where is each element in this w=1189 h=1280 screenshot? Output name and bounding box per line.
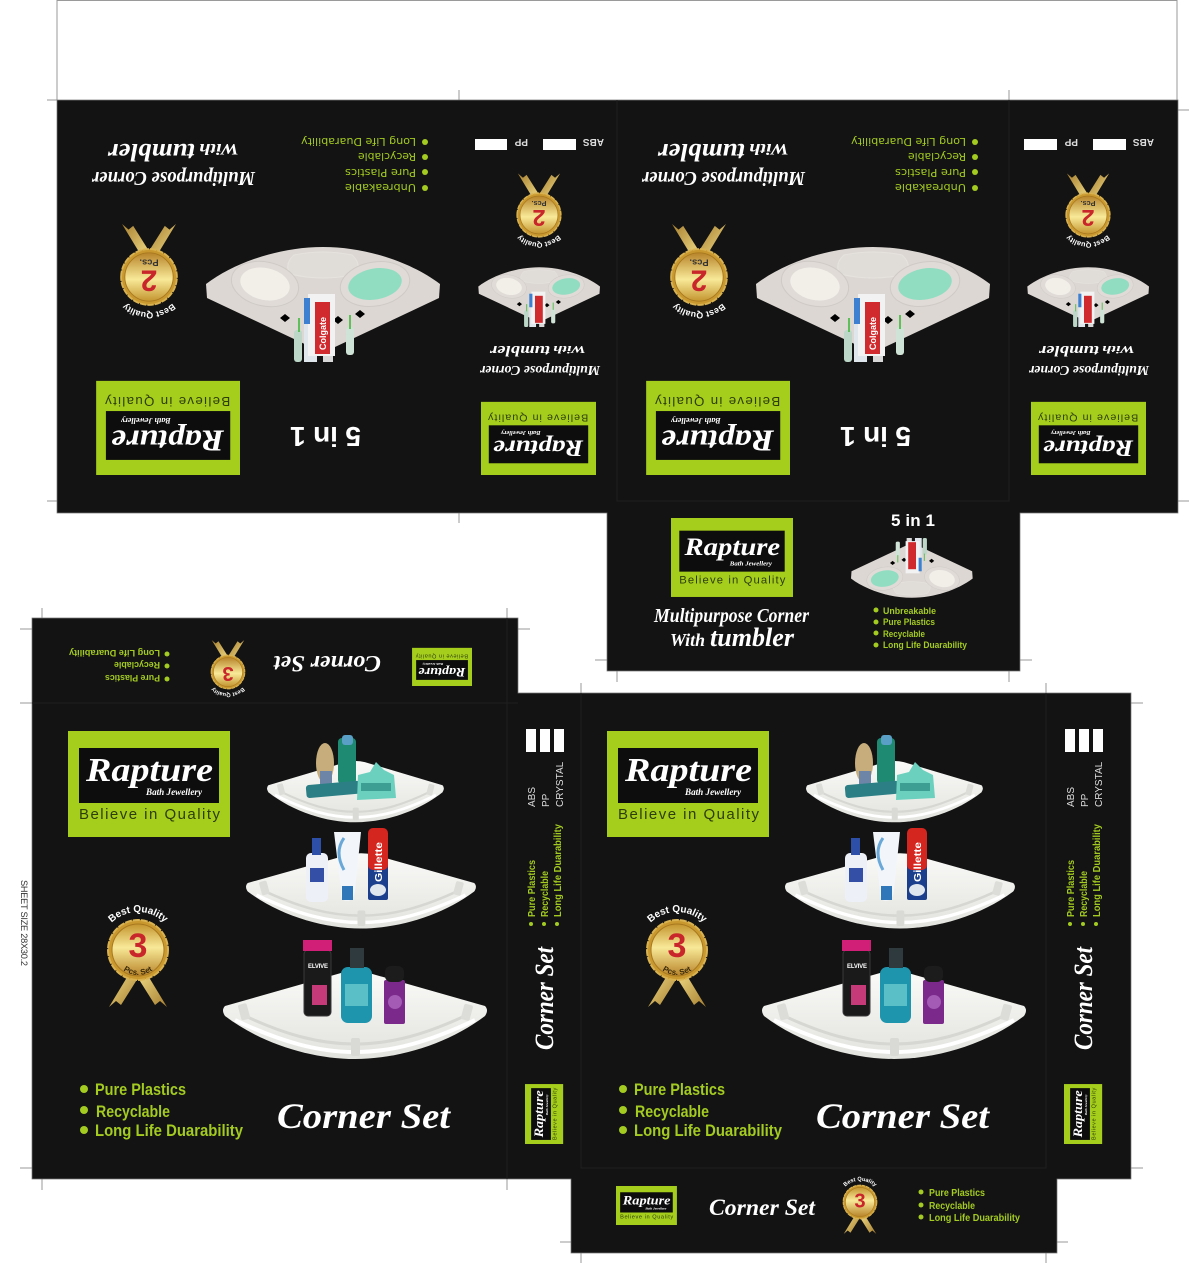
logo large right: Believe in Quality: [655, 394, 780, 409]
main right shelves with products: ELVIVE: [847, 964, 867, 970]
medal: 2 pcs large right: Pcs.: [689, 257, 709, 267]
left back panel features: Recyclable: [358, 150, 416, 162]
bottom flap medal: [842, 1176, 878, 1234]
right spine logo: Bath Jewellery: [1084, 1094, 1088, 1116]
logo small: [481, 402, 596, 475]
right spine features: Recyclable: [1079, 871, 1090, 917]
small title: With: [552, 343, 586, 354]
main right features: Recyclable: [635, 1102, 709, 1121]
logo large right: Rapture: [661, 424, 775, 458]
left panel title: tumbler: [108, 138, 195, 165]
medal: 2 pcs small: [516, 174, 562, 248]
left panel title: Multipurpose Corner: [92, 167, 256, 189]
logo small right: Bath Jewellery: [1051, 429, 1092, 436]
main left title: Corner Set: [277, 1096, 451, 1136]
top flap logo: Rapture: [418, 665, 466, 679]
logo small right: [1031, 402, 1146, 475]
left spine logo: Bath Jewellery: [545, 1094, 549, 1116]
main right logo: Rapture: [624, 752, 752, 789]
bottom flap logo: Rapture: [622, 1194, 671, 1207]
main left features: Long Life Duarability: [95, 1121, 243, 1140]
small title right: tumbler: [1039, 342, 1099, 358]
spine material tick boxes: ABS: [583, 136, 604, 147]
right spine logo: [1064, 1084, 1102, 1144]
left spine tick boxes and materials: ABS: [527, 787, 538, 807]
main left shelves with products: [223, 735, 487, 1059]
main left features: [80, 1080, 243, 1140]
left spine logo: Believe in Quality: [553, 1087, 559, 1140]
bottom flap features: Recyclable: [929, 1201, 975, 1212]
left spine logo: Rapture: [532, 1090, 546, 1138]
medal: 2 pcs large: 2: [141, 263, 157, 296]
panel: 5 in 1 box dieline: [56, 100, 1178, 672]
right spine tick boxes and materials: CRYSTAL: [1094, 761, 1105, 807]
main left features: Recyclable: [96, 1102, 170, 1121]
flap tray product: [851, 538, 973, 598]
left panel title: With: [199, 140, 239, 157]
right spine features: [1066, 824, 1103, 926]
right back panel features: Pure Plastics: [895, 166, 966, 178]
logo large right: Bath Jewellery: [671, 416, 722, 425]
medal: 2 pcs small right: Best Quality: [1066, 235, 1110, 248]
left back panel features: Unbreakable: [345, 181, 416, 193]
logo large right: [646, 381, 790, 475]
medal: 2 pcs small right: Pcs.: [1080, 199, 1096, 208]
medal: 2 pcs small right: [1065, 174, 1111, 248]
medal: 2 pcs small: 2: [532, 205, 546, 231]
left panel title: [92, 138, 256, 189]
main right features: Pure Plastics: [634, 1080, 725, 1099]
spine material tick boxes: PP: [514, 136, 528, 147]
main left medal: Best Quality: [108, 905, 168, 922]
flap features: Recyclable: [883, 629, 925, 640]
right spine tick boxes and materials: PP: [1080, 793, 1091, 807]
top flap features: Pure Plastics: [105, 672, 160, 683]
flap logo: Believe in Quality: [679, 575, 786, 587]
right back panel features: Long Life Duarability: [851, 135, 966, 147]
tray product large: Colgate: [318, 317, 328, 350]
right panel title: With: [749, 140, 789, 157]
main left medal: [107, 905, 169, 1007]
medal: 2 pcs large right: [670, 224, 728, 318]
spine material tick boxes: [475, 136, 604, 150]
top flap medal: Best Quality: [211, 688, 245, 698]
top flap features: Long Life Duarability: [68, 647, 160, 658]
right back panel features: Recyclable: [908, 150, 966, 162]
left back panel features: Long Life Duarability: [301, 135, 416, 147]
tray product small: [478, 267, 600, 327]
right spine material tick boxes: ABS: [1133, 136, 1154, 147]
small title: Multipurpose Corner: [479, 362, 601, 377]
flap features: Unbreakable: [883, 606, 936, 617]
main right features: [619, 1080, 782, 1140]
main left logo: Bath Jewellery: [145, 787, 203, 797]
main left shelves with products: Gillette: [374, 841, 385, 882]
right spine logo: Believe in Quality: [1092, 1087, 1098, 1140]
main left features: Pure Plastics: [95, 1080, 186, 1099]
logo large: Rapture: [111, 424, 225, 458]
5 in 1 label: 5 in 1: [290, 421, 361, 452]
right back panel features: [851, 135, 978, 193]
main left logo: Rapture: [85, 752, 213, 789]
medal: 2 pcs large right: Best Quality: [672, 304, 726, 318]
flap title: Multipurpose Corner: [653, 605, 809, 627]
main right medal: Best Quality: [646, 905, 707, 922]
left spine tick boxes and materials: PP: [541, 793, 552, 807]
top flap medal: [210, 640, 246, 698]
right panel title: tumbler: [658, 138, 745, 165]
bottom flap features: [918, 1188, 1020, 1224]
right spine material tick boxes: [1024, 136, 1154, 150]
medal: 2 pcs large: Pcs.: [139, 257, 159, 267]
main right logo: [607, 731, 769, 837]
medal: 2 pcs large: Best Quality: [122, 304, 176, 318]
medal: 2 pcs large: [120, 224, 178, 318]
main right medal: 3: [668, 927, 686, 965]
bottom flap medal: 3: [854, 1191, 866, 1213]
small title: [479, 342, 601, 377]
flap title: tumbler: [710, 623, 795, 652]
logo large: [96, 381, 240, 475]
left spine features: Recyclable: [540, 871, 551, 917]
logo small: Believe in Quality: [487, 411, 588, 423]
medal: 2 pcs large right: 2: [691, 263, 707, 296]
right panel title: Multipurpose Corner: [642, 167, 806, 189]
tray product large right: [756, 247, 990, 362]
top flap logo: Bath Jewellery: [422, 662, 444, 666]
flap title: [653, 605, 809, 652]
top flap medal: 3: [222, 662, 234, 684]
bottom flap title: Corner Set: [709, 1195, 816, 1220]
flap features: Pure Plastics: [883, 617, 935, 628]
tray product large right: Colgate: [868, 317, 878, 350]
small title right: [1028, 342, 1150, 377]
right panel title: [642, 138, 806, 189]
main right logo: Believe in Quality: [618, 806, 760, 823]
left spine features: Long Life Duarability: [553, 824, 564, 917]
top flap features: [68, 647, 170, 683]
right spine material tick boxes: PP: [1064, 136, 1078, 147]
logo small right: Rapture: [1043, 435, 1134, 460]
small title: tumbler: [490, 342, 550, 358]
flap logo: Bath Jewellery: [729, 561, 773, 568]
sheet size note: SHEET SIZE 28X30.2: [19, 880, 29, 966]
right spine tick boxes and materials: [1065, 729, 1105, 807]
main left logo: Believe in Quality: [79, 806, 220, 823]
main right shelves with products: Gillette: [913, 841, 924, 882]
flap features: [874, 606, 968, 651]
panel: corner set box dieline: [32, 618, 1132, 1254]
bottom flap features: Pure Plastics: [929, 1188, 985, 1199]
logo small: Bath Jewellery: [501, 429, 542, 436]
main right medal: [646, 905, 708, 1007]
main left logo: [68, 731, 230, 837]
left back panel features: Pure Plastics: [345, 166, 416, 178]
tray product small right: [1027, 267, 1149, 327]
tray product large: [206, 247, 440, 362]
main right medal: Pcs. Set: [662, 966, 692, 975]
right spine features: Pure Plastics: [1066, 860, 1077, 917]
left spine title: Corner Set: [530, 946, 559, 1050]
logo large: Bath Jewellery: [121, 416, 172, 425]
logo large: Believe in Quality: [105, 394, 230, 409]
flap logo: [671, 518, 793, 597]
left spine features: [527, 824, 564, 926]
medal: 2 pcs small: Pcs.: [531, 199, 547, 208]
logo small: Rapture: [493, 435, 584, 460]
main left medal: 3: [129, 927, 147, 965]
top flap title: Corner Set: [273, 651, 381, 676]
bottom flap logo: Believe in Quality: [620, 1214, 673, 1220]
flap features: Long Life Duarability: [883, 640, 968, 651]
right spine tick boxes and materials: ABS: [1066, 787, 1077, 807]
flap logo: Rapture: [683, 532, 780, 561]
5 in 1 label right: 5 in 1: [840, 421, 911, 452]
left spine tick boxes and materials: CRYSTAL: [555, 761, 566, 807]
medal: 2 pcs small right: 2: [1081, 205, 1095, 231]
right back panel features: Unbreakable: [895, 181, 966, 193]
main right logo: Bath Jewellery: [684, 787, 742, 797]
main right title: Corner Set: [816, 1096, 990, 1136]
left spine tick boxes and materials: [526, 729, 566, 807]
main right shelves with products: [762, 735, 1026, 1059]
left back panel features: [301, 135, 428, 193]
main left shelves with products: ELVIVE: [308, 964, 328, 970]
main right features: Long Life Duarability: [634, 1121, 782, 1140]
right spine logo: Rapture: [1071, 1090, 1085, 1138]
top flap logo: Believe in Quality: [415, 652, 468, 658]
top flap features: Recyclable: [114, 659, 160, 670]
flap 5 in 1 label: 5 in 1: [891, 511, 935, 530]
bottom flap features: Long Life Duarability: [929, 1213, 1020, 1224]
bottom flap medal: Best Quality: [843, 1176, 877, 1186]
small title right: With: [1101, 343, 1135, 354]
left spine features: Pure Plastics: [527, 860, 538, 917]
bottom flap logo: [616, 1186, 677, 1225]
medal: 2 pcs small: Best Quality: [517, 235, 562, 248]
bottom flap logo: Bath Jewellery: [644, 1207, 667, 1211]
main left medal: Pcs. Set: [124, 966, 152, 975]
right spine features: Long Life Duarability: [1092, 824, 1103, 917]
logo small right: Believe in Quality: [1037, 411, 1138, 423]
top flap logo: [412, 648, 472, 686]
left spine logo: [525, 1084, 563, 1144]
right spine title: Corner Set: [1069, 946, 1098, 1050]
flap title: With: [670, 630, 705, 650]
small title right: Multipurpose Corner: [1028, 362, 1150, 377]
